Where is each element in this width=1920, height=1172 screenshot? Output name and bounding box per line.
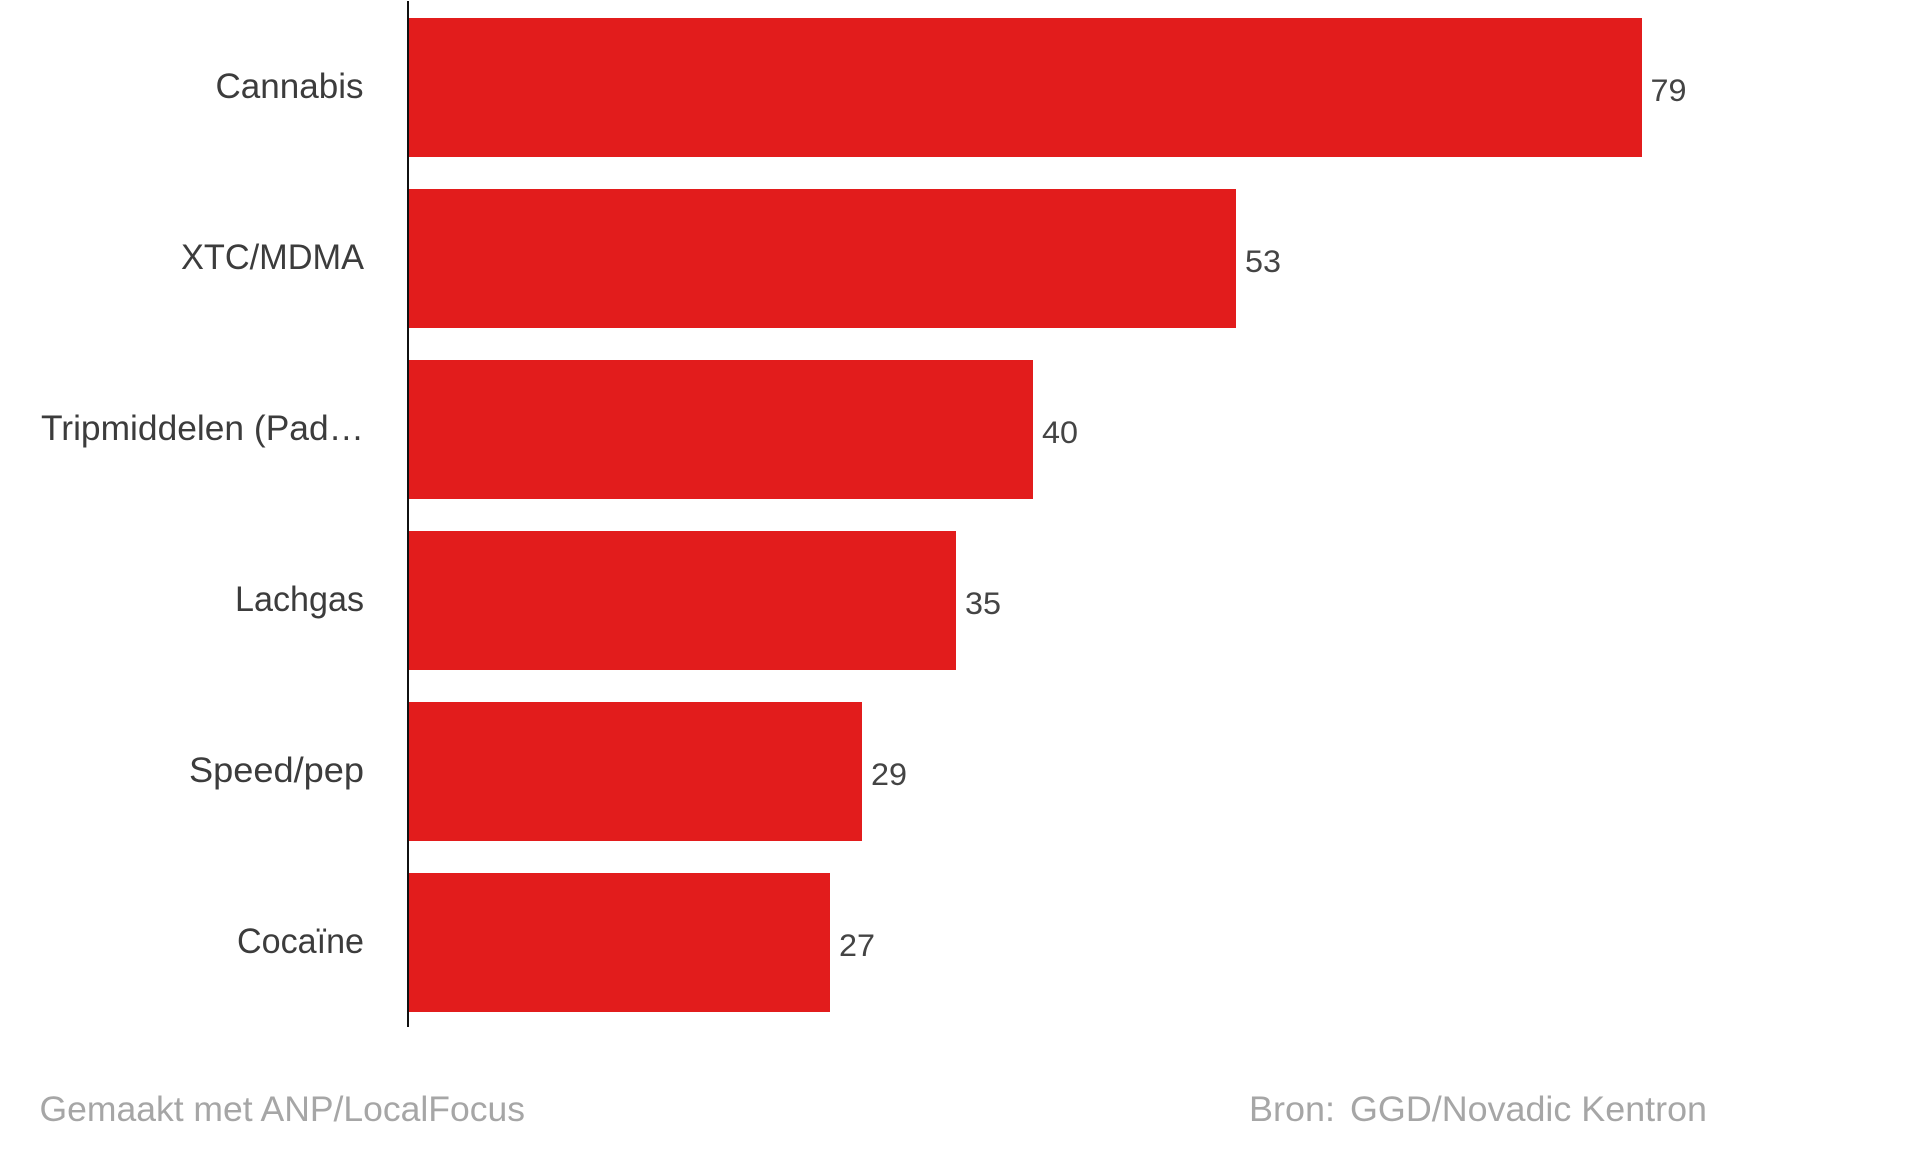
bar: Tripmiddelen [409,360,1033,499]
vertical axis line [407,1,409,1027]
row: Cannabis [216,18,1686,157]
bar: Cocaïne [409,873,830,1012]
row: Cocaïne [237,873,875,1012]
category label: Lachgas: Lachgas [235,580,364,619]
source name: GGD/Novadic Kentron [1350,1090,1707,1129]
category label: XTC/MDMA: XTC/MDMA [181,238,365,277]
category label: Speed/pep: Speed/pep [189,751,364,790]
value: 79: 79 [1650,72,1686,108]
value: 35: 35 [965,585,1001,621]
source label: Bron: [1249,1090,1335,1129]
category label: Cocaïne: Cocaïne [237,922,364,961]
value: 27: 27 [839,927,875,963]
value: 29: 29 [871,756,907,792]
footer credit: Gemaakt met ANP/LocalFocus [40,1090,525,1129]
row: Lachgas [235,531,1001,670]
category label: Tripmiddelen: Tripmiddelen (Pad… [41,409,364,448]
value: 53: 53 [1245,243,1281,279]
bar: Cannabis [409,18,1642,157]
category label: Cannabis: Cannabis [216,67,364,106]
value: 40: 40 [1042,414,1078,450]
row: Tripmiddelen [41,360,1078,499]
row: XTC/MDMA [181,189,1281,328]
bar: Lachgas [409,531,956,670]
bar: XTC/MDMA [409,189,1236,328]
source [1249,1090,1707,1129]
bar: Speed/pep [409,702,862,841]
row: Speed/pep [189,702,907,841]
